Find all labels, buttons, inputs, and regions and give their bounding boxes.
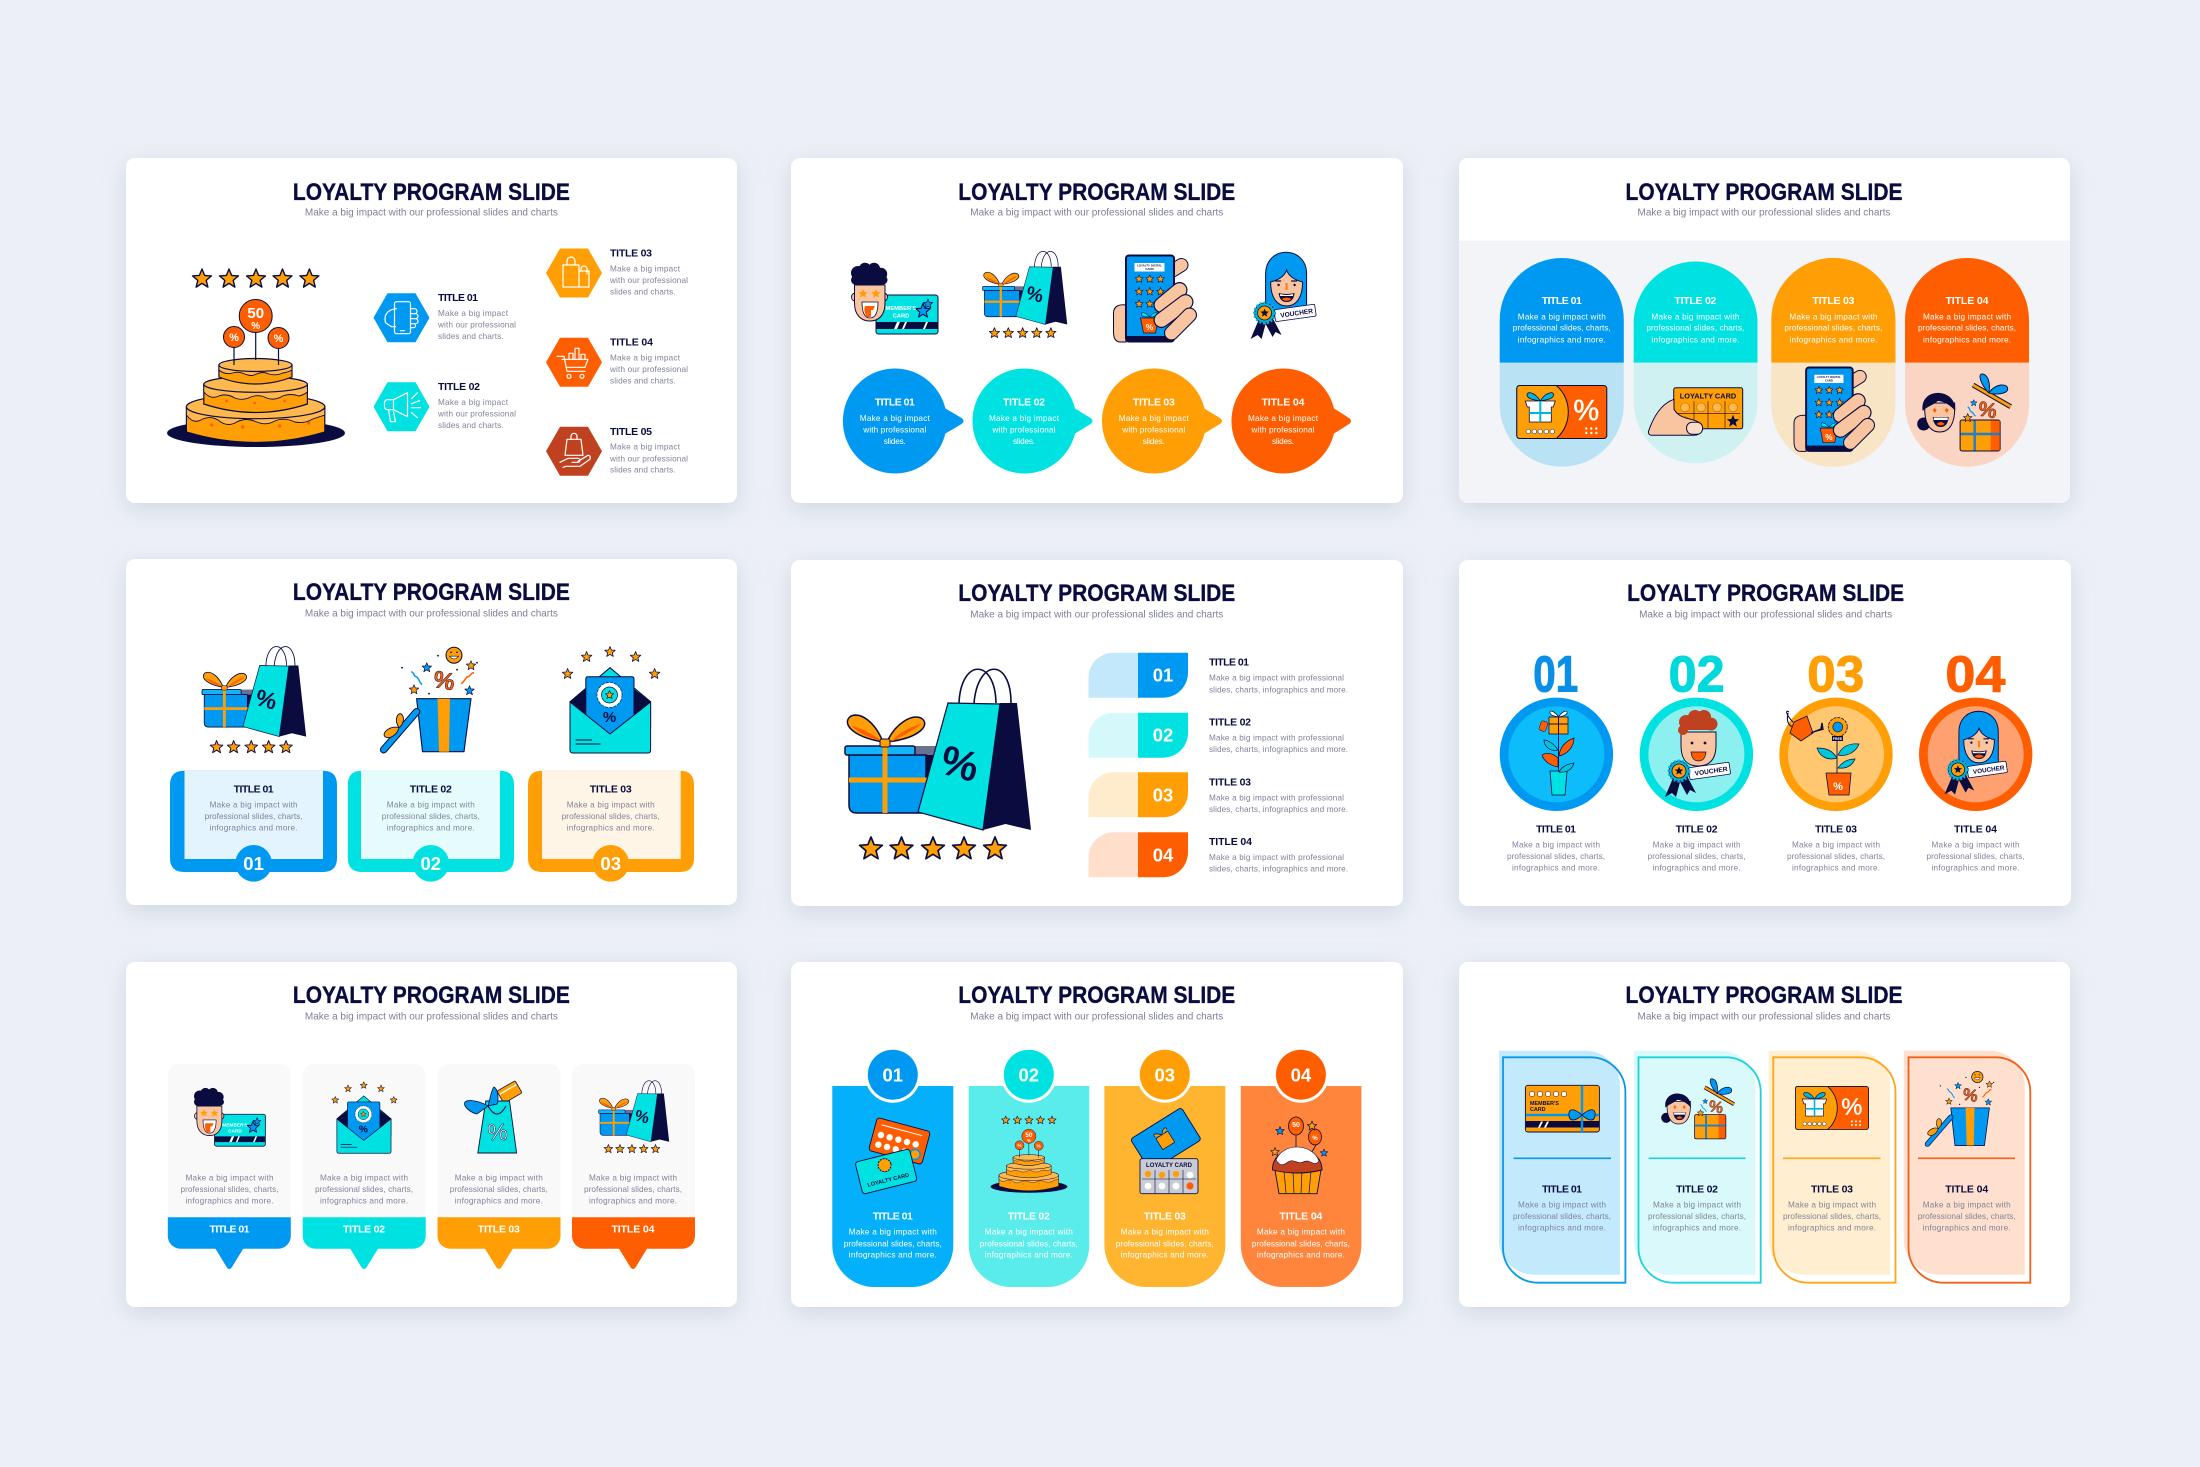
card 03: Make a big impact with: [1788, 1200, 1876, 1209]
card 02: Make a big impact with: [320, 1173, 408, 1182]
capsule 03: [1771, 258, 1896, 467]
card 01: TITLE 01: [1542, 1183, 1582, 1195]
card 03: infographics and more.: [567, 824, 655, 833]
card 03: [1104, 1047, 1225, 1287]
text: title 01: slides and charts.: [438, 332, 504, 341]
capsule 02: TITLE 02: [1674, 295, 1717, 307]
heading: LOYALTY PROGRAM SLIDE: [293, 982, 570, 1009]
illustration: gift card and stamp card: LOYALTY CARD: [1146, 1163, 1193, 1169]
heading: LOYALTY PROGRAM SLIDE: [293, 579, 570, 606]
illustration: gift box and bag: [598, 1081, 669, 1153]
heading: [293, 179, 570, 219]
capsule 04: infographics and more.: [1923, 335, 2011, 344]
card 02: 02: [1019, 1064, 1039, 1085]
card 03: Make a big impact with: [1121, 1228, 1209, 1237]
card 04: 04: [1291, 1064, 1312, 1085]
illustration: two loyalty cards: LOYALTY CARD: [867, 1173, 910, 1189]
text: title 03: TITLE 03: [610, 248, 652, 260]
text: title 04: [609, 337, 688, 385]
capsule 02: infographics and more.: [1651, 335, 1739, 344]
column 02: [1640, 646, 1753, 873]
bubble 04: slides.: [1272, 437, 1294, 446]
panel: four speech bubbles: [791, 158, 1403, 503]
column 04: 04: [1945, 646, 2006, 703]
card 01: TITLE 01: [210, 1223, 250, 1235]
capsule 04: Make a big impact with: [1923, 312, 2011, 321]
card 02: infographics and more.: [387, 824, 475, 833]
column 03: [1779, 646, 1893, 873]
row 02: Make a big impact with professional: [1209, 734, 1344, 742]
row 03: 03: [1153, 784, 1173, 805]
capsule 01: professional slides, charts,: [1513, 324, 1611, 333]
card 02: infographics and more.: [985, 1251, 1073, 1260]
text: title 02: [437, 381, 516, 430]
card 03: TITLE 03: [590, 783, 632, 795]
text: title 05: slides and charts.: [610, 466, 676, 475]
text: title 03: Make a big impact: [610, 264, 681, 273]
capsule 04: TITLE 04: [1946, 295, 1989, 307]
illustration: woman with voucher: [1251, 252, 1316, 339]
icon: shopping bags: [546, 248, 602, 298]
capsule 02: Make a big impact with: [1651, 312, 1740, 321]
text: title 01: TITLE 01: [438, 292, 478, 304]
row 01: slides, charts, infographics and more.: [1209, 685, 1348, 694]
capsule 03: infographics and more.: [1789, 335, 1877, 344]
panel: three framed cards: [126, 559, 737, 905]
row 04: 04: [1153, 844, 1174, 865]
card 03: professional slides, charts,: [1116, 1239, 1214, 1248]
illustration: gift card and stamp card: [1130, 1107, 1201, 1194]
card 02: [1634, 1051, 1761, 1283]
column 03: Make a big impact with: [1792, 841, 1880, 850]
text: title 04: with our professional: [609, 365, 688, 374]
bubble 01: [843, 369, 964, 474]
card 02: Make a big impact with: [387, 800, 475, 809]
illustration: gift box and bag: [202, 647, 306, 753]
capsule 02: [1634, 262, 1758, 463]
illustration: watering can and flower: FREE: [1833, 737, 1843, 741]
row 04: [1088, 832, 1348, 877]
card 04: Make a big impact with: [1923, 1200, 2011, 1209]
card 04: infographics and more.: [589, 1196, 677, 1205]
text: title 04: slides and charts.: [610, 376, 676, 385]
bubble 04: with professional: [1250, 426, 1315, 435]
card 01: infographics and more.: [210, 824, 298, 833]
capsule 01: Make a big impact with: [1518, 312, 1606, 321]
card 02: [303, 1064, 426, 1269]
card 04: TITLE 04: [1279, 1211, 1323, 1223]
capsule 03: professional slides, charts,: [1784, 324, 1882, 333]
bubble 03: Make a big impact: [1119, 414, 1190, 423]
card 02: [969, 1047, 1089, 1287]
heading: Make a big impact with our professional slides and charts: [1638, 208, 1890, 219]
card 04: professional slides, charts,: [1918, 1212, 2016, 1221]
text: title 04: TITLE 04: [610, 337, 653, 349]
card 01: infographics and more.: [186, 1196, 274, 1205]
capsule 04: [1905, 258, 2029, 467]
bubble 03: [1102, 369, 1222, 474]
text: title 02: Make a big impact: [438, 398, 509, 407]
bubble 02: slides.: [1013, 437, 1035, 446]
text: title 01: with our professional: [437, 321, 516, 330]
card 04: Make a big impact with: [589, 1173, 677, 1182]
bubble 03: slides.: [1143, 437, 1165, 446]
card 02: Make a big impact with: [985, 1228, 1073, 1237]
bubble 02: with professional: [992, 426, 1056, 435]
card 04: TITLE 04: [1945, 1183, 1988, 1195]
column 03: TITLE 03: [1815, 823, 1857, 835]
card 01: professional slides, charts,: [180, 1185, 278, 1194]
row 01: [1088, 653, 1348, 698]
column 04: TITLE 04: [1954, 823, 1997, 835]
card 01: 01: [883, 1064, 903, 1085]
text: title 05: with our professional: [609, 454, 688, 463]
illustration: opened gift box: [1927, 1071, 1994, 1146]
bubble 04: [1231, 369, 1351, 474]
card 04: professional slides, charts,: [1252, 1239, 1350, 1248]
column 04: infographics and more.: [1932, 864, 2020, 873]
card 03: infographics and more.: [1121, 1251, 1209, 1260]
capsule 01: TITLE 01: [1542, 295, 1582, 307]
bubble 04: TITLE 04: [1262, 397, 1305, 409]
card 03: 03: [600, 853, 621, 874]
text: title 02: with our professional: [437, 410, 516, 419]
card 02: professional slides, charts,: [980, 1239, 1078, 1248]
capsule 01: [1500, 258, 1624, 467]
heading: LOYALTY PROGRAM SLIDE: [958, 580, 1235, 607]
card 04: infographics and more.: [1923, 1223, 2011, 1232]
bubble 01: with professional: [862, 426, 926, 435]
illustration: gift plant: [1538, 711, 1574, 795]
heading: Make a big impact with our professional slides and charts: [305, 1012, 558, 1023]
column 03: professional slides, charts,: [1787, 852, 1885, 861]
card 01: [1499, 1051, 1625, 1283]
panel: four outlined leaf cards: [1459, 962, 2070, 1307]
card 02: TITLE 02: [1676, 1183, 1718, 1195]
illustration: cupcake with balloons: %: [1312, 1136, 1318, 1142]
illustration: member's card with bow: MEMBER'S: [1530, 1101, 1559, 1107]
column 01: Make a big impact with: [1512, 841, 1600, 850]
illustration: opened gift box: [384, 647, 478, 752]
bubble 03: TITLE 03: [1133, 397, 1175, 409]
heading: [1627, 580, 1904, 621]
heading: Make a big impact with our professional slides and charts: [970, 208, 1223, 219]
heading: LOYALTY PROGRAM SLIDE: [958, 179, 1235, 206]
illustration: watering can and flower: %: [1833, 781, 1843, 793]
illustration: gift voucher card: [1795, 1086, 1869, 1129]
illustration: watering can and flower: [1787, 711, 1859, 795]
illustration: man with member's card: [194, 1088, 265, 1146]
column 01: [1500, 646, 1613, 873]
heading: Make a big impact with our professional slides and charts: [305, 208, 558, 219]
illustration: hand with loyalty card: [1648, 388, 1743, 435]
bubble 01: Make a big impact: [860, 414, 931, 423]
row 01: 01: [1153, 665, 1173, 686]
illustration: bag with bow and card: [464, 1081, 522, 1153]
column 02: TITLE 02: [1676, 823, 1718, 835]
illustration: tiered cake: [991, 1116, 1067, 1193]
card 01: 01: [243, 853, 264, 874]
bubble 01: TITLE 01: [875, 397, 915, 409]
card 02: TITLE 02: [343, 1223, 385, 1235]
card 01: TITLE 01: [234, 783, 274, 795]
card 01: professional slides, charts,: [205, 812, 303, 821]
card 01: professional slides, charts,: [844, 1239, 942, 1248]
row 01: Make a big impact with professional: [1209, 674, 1344, 683]
card 04: TITLE 04: [612, 1223, 655, 1235]
capsule 04: professional slides, charts,: [1918, 324, 2016, 333]
heading: [293, 579, 570, 620]
heading: LOYALTY PROGRAM SLIDE: [1627, 580, 1904, 607]
text: title 03: [609, 248, 688, 296]
text: title 03: with our professional: [609, 276, 688, 285]
column 02: 02: [1669, 646, 1725, 703]
card 02: infographics and more.: [320, 1196, 408, 1205]
card 01: [832, 1047, 953, 1287]
card 01: Make a big impact with: [210, 800, 298, 809]
card 01: Make a big impact with: [186, 1173, 274, 1182]
capsule 01: infographics and more.: [1518, 335, 1606, 344]
card 04: Make a big impact with: [1257, 1228, 1345, 1237]
heading: Make a big impact with our professional slides and charts: [305, 609, 558, 620]
heading: LOYALTY PROGRAM SLIDE: [293, 179, 570, 206]
illustration: cupcake with balloons: [1271, 1117, 1328, 1194]
illustration: woman with gift box: [1661, 1079, 1734, 1139]
bubble 04: Make a big impact: [1248, 414, 1319, 423]
card 03: TITLE 03: [478, 1223, 520, 1235]
illustration: woman with voucher: [1944, 711, 2008, 795]
card 04: [1241, 1047, 1361, 1287]
illustration: man with voucher: [1665, 710, 1731, 797]
card 03: Make a big impact with: [455, 1173, 543, 1182]
heading: Make a big impact with our professional slides and charts: [970, 610, 1223, 621]
card 03: infographics and more.: [455, 1196, 543, 1205]
bubble 02: TITLE 02: [1003, 397, 1045, 409]
row 03: TITLE 03: [1209, 776, 1251, 788]
illustration: phone in hand: [1114, 256, 1190, 342]
panel: four cards with pointer titles: [126, 962, 737, 1307]
bubble 02: Make a big impact: [989, 414, 1060, 423]
illustration: tiered cake with stars: [167, 269, 345, 447]
heading: [958, 580, 1235, 621]
heading: LOYALTY PROGRAM SLIDE: [958, 982, 1235, 1009]
column 01: 01: [1533, 646, 1578, 703]
heading: Make a big impact with our professional slides and charts: [1638, 1012, 1890, 1023]
illustration: gift box and bag: [845, 669, 1031, 859]
row 02: [1088, 713, 1348, 758]
card 03: 03: [1155, 1064, 1175, 1085]
card 02: Make a big impact with: [1653, 1200, 1741, 1209]
illustration: member's card with bow: [1525, 1085, 1599, 1132]
row 02: 02: [1153, 725, 1173, 746]
card 04: [1904, 1051, 2030, 1283]
bubble 01: slides.: [884, 437, 906, 446]
card 02: [348, 771, 514, 882]
illustration: man with member's card: [851, 263, 938, 334]
card 01: Make a big impact with: [849, 1228, 937, 1237]
panel: four arched cards with number circles: [791, 962, 1403, 1307]
card 02: TITLE 02: [410, 783, 452, 795]
row 01: TITLE 01: [1209, 657, 1249, 669]
row 03: Make a big impact with professional: [1209, 793, 1344, 802]
column 01: infographics and more.: [1512, 864, 1600, 873]
illustration: gift box and bag: [983, 251, 1067, 338]
card 01: professional slides, charts,: [1513, 1212, 1611, 1221]
text: title 02: TITLE 02: [438, 381, 480, 393]
column 03: infographics and more.: [1792, 864, 1880, 873]
capsule 03: Make a big impact with: [1789, 312, 1878, 321]
card 01: Make a big impact with: [1518, 1200, 1606, 1209]
card 03: professional slides, charts,: [450, 1185, 548, 1194]
card 03: Make a big impact with: [567, 800, 655, 809]
card 01: TITLE 01: [873, 1211, 913, 1223]
icon: megaphone: [374, 382, 430, 431]
card 04: [572, 1064, 695, 1269]
illustration: phone in hand: [1794, 367, 1868, 451]
row 04: Make a big impact with professional: [1209, 853, 1344, 862]
text: title 05: Make a big impact: [610, 443, 681, 452]
card 01: [170, 771, 337, 882]
heading: [958, 982, 1235, 1023]
text: title 02: slides and charts.: [438, 421, 504, 430]
panel: large gift and numbered tabs: [791, 560, 1403, 906]
illustration: two loyalty cards: [855, 1117, 930, 1194]
panel: cake with five hexagon titles: [126, 158, 737, 503]
card 03: [438, 1064, 560, 1269]
illustration: bag with bow and card: %: [487, 1119, 508, 1145]
column 04: professional slides, charts,: [1926, 852, 2024, 861]
row 02: TITLE 02: [1209, 716, 1251, 728]
card 03: infographics and more.: [1788, 1223, 1876, 1232]
heading: [1626, 982, 1902, 1023]
illustration: woman with gift box: [1917, 374, 2011, 451]
illustration: envelope with stars: [332, 1082, 397, 1153]
card 03: TITLE 03: [1144, 1211, 1186, 1223]
column 04: Make a big impact with: [1932, 841, 2020, 850]
card 03: [528, 771, 694, 882]
heading: LOYALTY PROGRAM SLIDE: [1626, 179, 1902, 206]
card 02: infographics and more.: [1653, 1223, 1741, 1232]
illustration: envelope with stars: [562, 646, 660, 753]
card 01: infographics and more.: [849, 1251, 937, 1260]
card 02: professional slides, charts,: [1648, 1212, 1746, 1221]
row 03: [1088, 772, 1348, 817]
card 03: professional slides, charts,: [1783, 1212, 1881, 1221]
card 01: [168, 1064, 291, 1269]
heading: LOYALTY PROGRAM SLIDE: [1626, 982, 1902, 1009]
row 02: slides, charts, infographics and more.: [1209, 745, 1348, 754]
heading: Make a big impact with our professional slides and charts: [970, 1012, 1223, 1023]
capsule 03: TITLE 03: [1812, 295, 1855, 307]
illustration: gift voucher card: [1517, 386, 1607, 438]
row 04: slides, charts, infographics and more.: [1209, 865, 1348, 874]
illustration: cupcake with balloons: 50: [1292, 1122, 1300, 1129]
text: title 01: [437, 292, 516, 341]
row 03: slides, charts, infographics and more.: [1209, 805, 1348, 814]
card 02: professional slides, charts,: [382, 812, 480, 821]
heading: [293, 982, 570, 1023]
card 03: professional slides, charts,: [562, 812, 660, 821]
card 01: infographics and more.: [1518, 1223, 1606, 1232]
text: title 05: TITLE 05: [610, 426, 652, 438]
bubble 03: with professional: [1121, 426, 1185, 435]
column 01: professional slides, charts,: [1507, 852, 1605, 861]
column 01: TITLE 01: [1536, 823, 1576, 835]
heading: [1626, 179, 1902, 219]
card 02: professional slides, charts,: [315, 1185, 413, 1194]
heading: Make a big impact with our professional slides and charts: [1639, 610, 1892, 621]
column 02: Make a big impact with: [1653, 841, 1741, 850]
card 03: TITLE 03: [1811, 1183, 1853, 1195]
text: title 03: slides and charts.: [610, 287, 676, 296]
capsule 02: professional slides, charts,: [1646, 324, 1744, 333]
panel: four capsules on grey: [1459, 158, 2070, 503]
column 02: infographics and more.: [1653, 864, 1741, 873]
column 04: [1919, 646, 2032, 873]
text: title 05: [609, 426, 688, 475]
panel: four numbered circles: [1459, 560, 2071, 906]
icon: shopping cart: [546, 338, 602, 387]
card 04: professional slides, charts,: [584, 1185, 682, 1194]
row 04: TITLE 04: [1209, 836, 1252, 848]
card 04: infographics and more.: [1257, 1251, 1345, 1260]
heading: [958, 179, 1235, 219]
illustration: member's card with bow: CARD: [1530, 1107, 1546, 1113]
card 02: 02: [421, 853, 441, 874]
icon: hand holding phone: [374, 293, 430, 342]
text: title 01: Make a big impact: [438, 309, 509, 318]
column 02: professional slides, charts,: [1648, 852, 1746, 861]
bubble 02: [972, 369, 1092, 474]
text: title 04: Make a big impact: [610, 354, 681, 363]
card 02: TITLE 02: [1008, 1211, 1050, 1223]
icon: hand with bag: [546, 427, 602, 476]
card 03: [1769, 1051, 1896, 1283]
column 03: 03: [1807, 646, 1864, 703]
